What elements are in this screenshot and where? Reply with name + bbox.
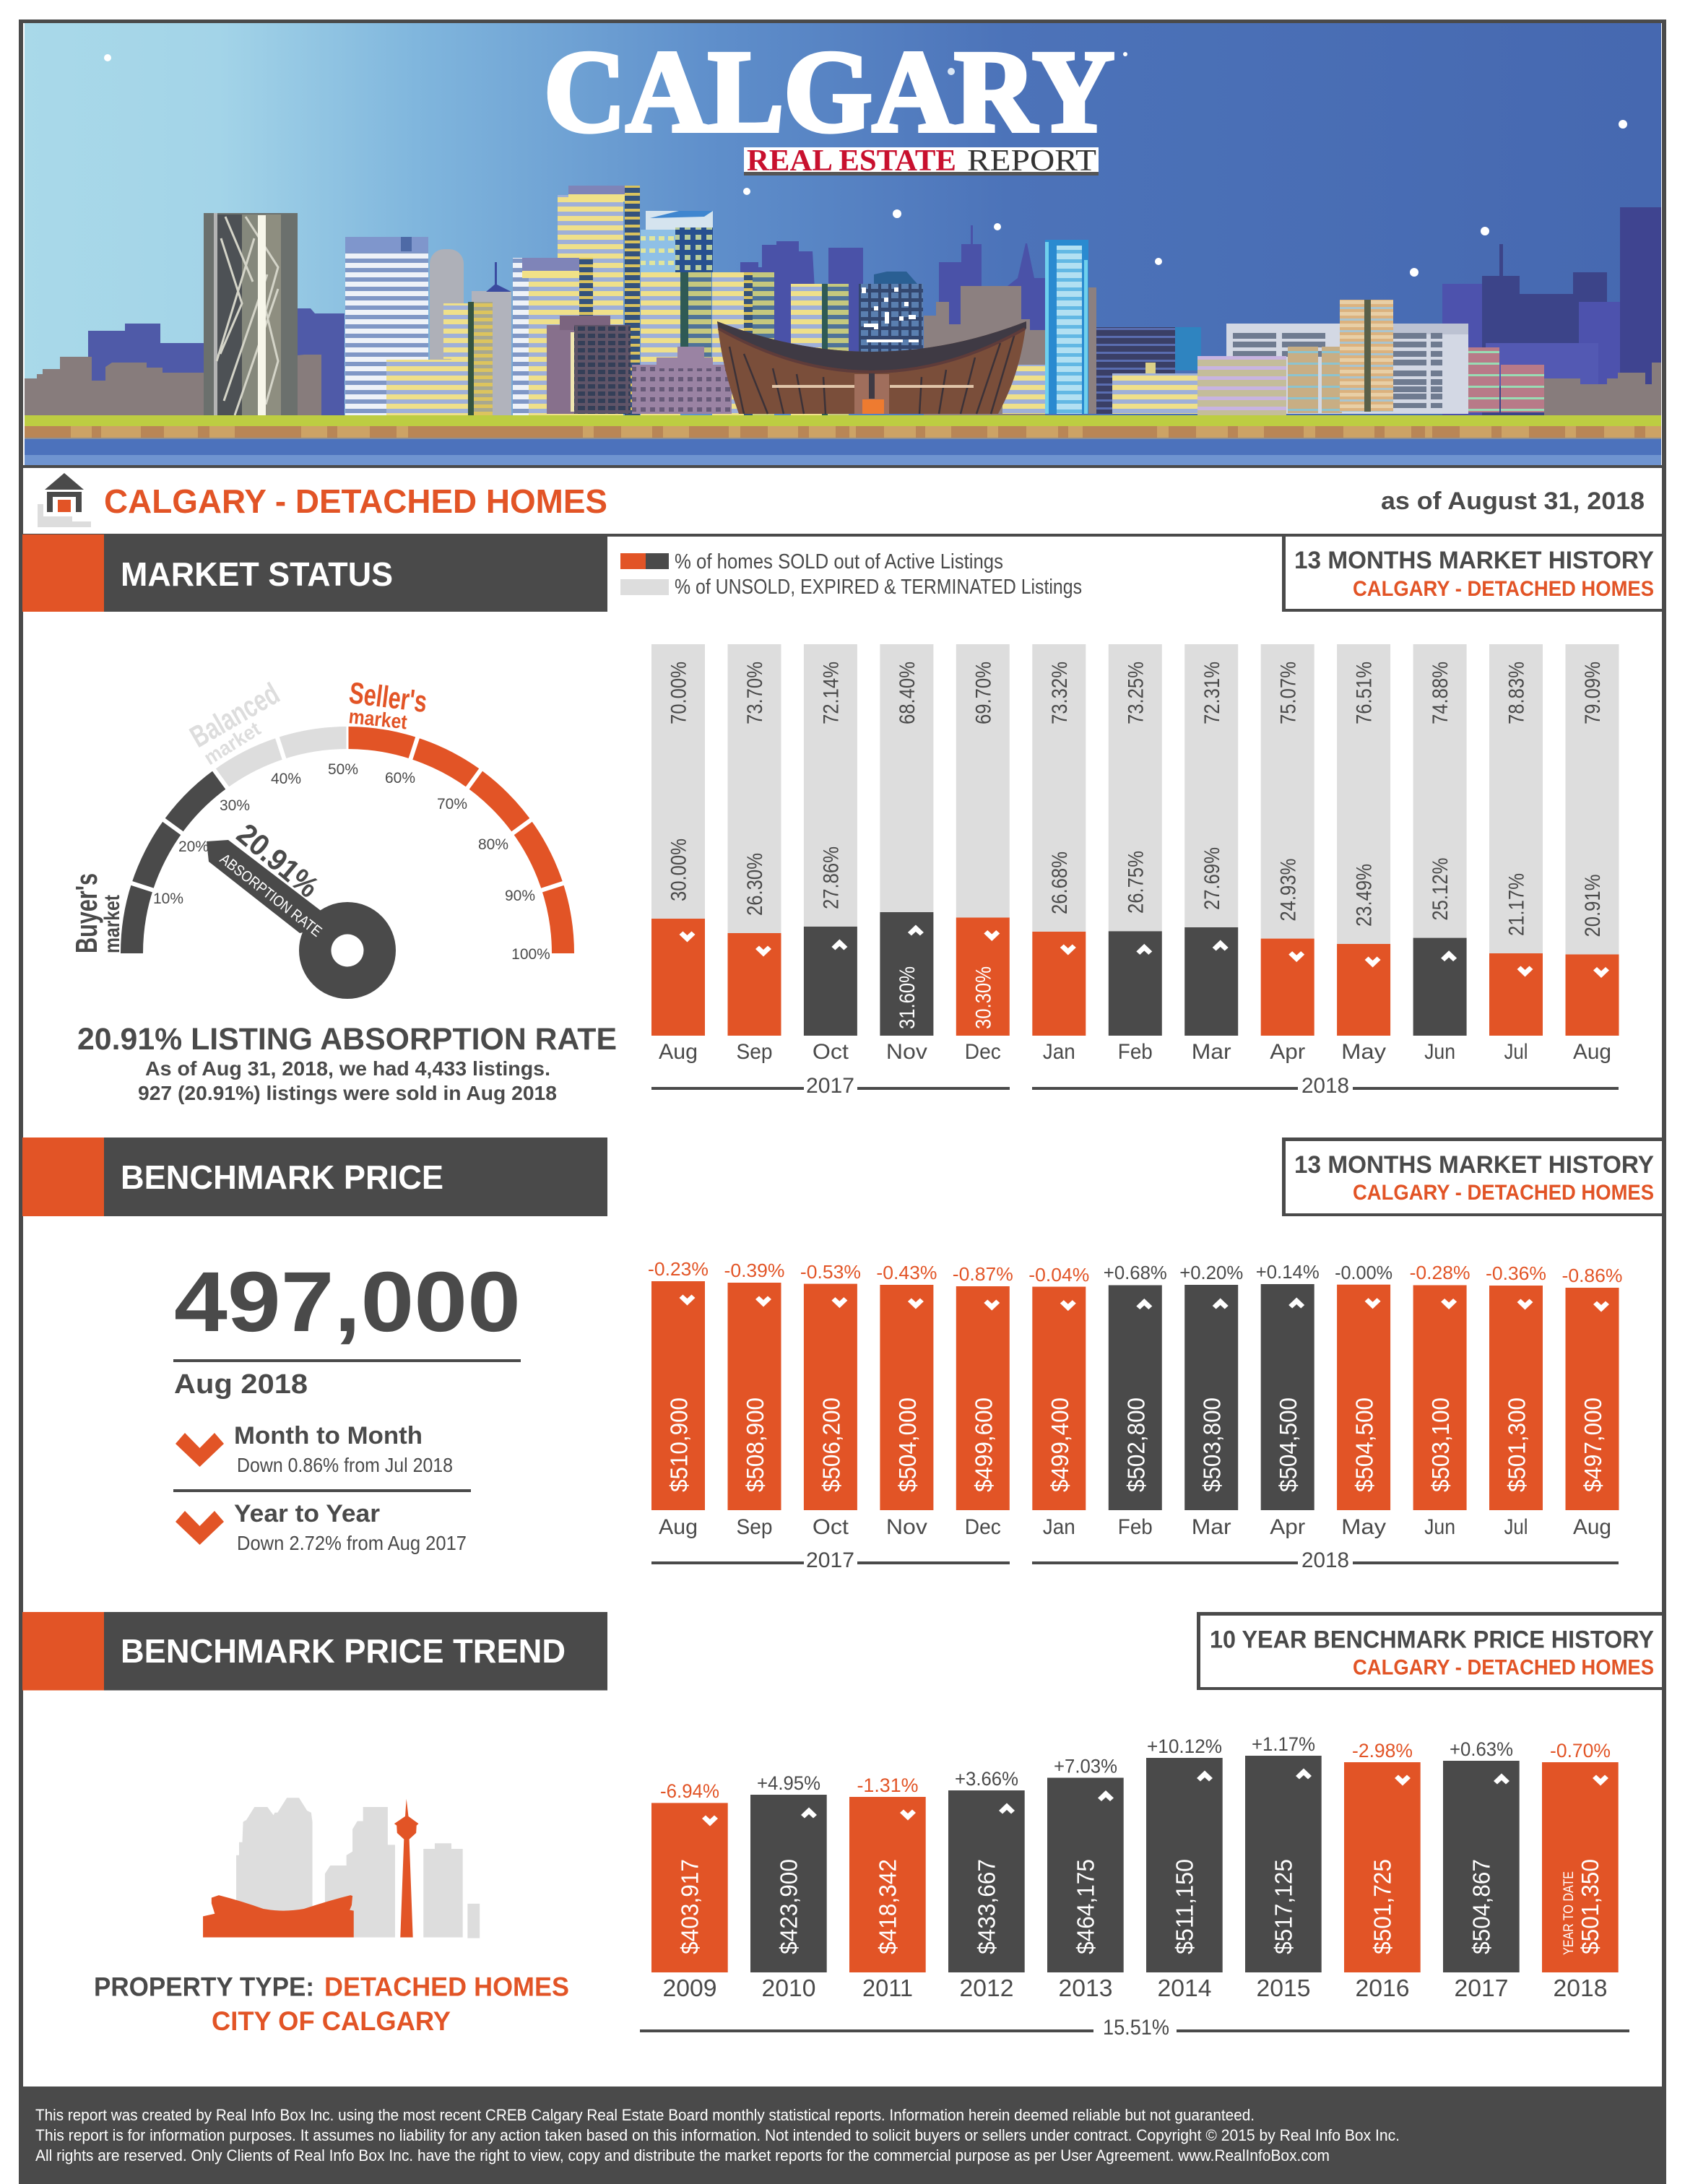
bar: Sep 2017: -0.39% — [724, 1260, 784, 1281]
bar: Jul 2018: Jul — [1504, 1040, 1528, 1064]
property type caption — [94, 1972, 569, 2036]
bar: Apr 2018: Apr — [1270, 1515, 1305, 1539]
subtitle: Real Estate Report: REPORT — [967, 144, 1096, 178]
bar: 2010: $423,900 — [776, 1859, 802, 1954]
bar: Jul 2018 — [1489, 644, 1543, 1064]
month to month — [234, 1422, 453, 1476]
bar: Jun 2018: 25.12% — [1429, 858, 1452, 921]
price date: Aug 2018 — [174, 1369, 308, 1400]
stacked bar chart: 13 months market history — [651, 644, 1619, 1098]
bar: 2014: 2014 — [1157, 1975, 1212, 2001]
bar: Feb 2018: +0.68% — [1104, 1262, 1167, 1283]
section header: benchmark price trend — [22, 1612, 607, 1690]
year to year: Year to Year — [234, 1500, 380, 1528]
year to year — [234, 1500, 467, 1554]
label: balanced market — [184, 676, 285, 769]
section header: benchmark price trend: BENCHMARK PRICE TREND — [121, 1632, 566, 1670]
bar: Oct 2017: Oct — [813, 1515, 849, 1539]
bar: Jan 2018: 26.68% — [1048, 852, 1072, 914]
bar: Dec 2017: Dec — [965, 1040, 1001, 1064]
section header: market status: MARKET STATUS — [121, 555, 393, 593]
text block: absorption rate: As of Aug 31, 2018, we had 4,433 listings. — [145, 1057, 550, 1080]
bar: 2013: 2013 — [1059, 1975, 1112, 2001]
bar: Jun 2018: Jun — [1424, 1040, 1455, 1064]
bar: 2009: $403,917 — [677, 1859, 703, 1954]
bar: Oct 2017: Oct — [813, 1040, 849, 1064]
bar: Sep 2017: $508,900 — [742, 1398, 768, 1492]
bar: Mar 2018: +0.20% — [1179, 1262, 1243, 1283]
icon: house — [38, 473, 91, 527]
bar: 2016: $501,725 — [1369, 1859, 1396, 1954]
bar chart: monthly benchmark prices — [648, 1258, 1622, 1572]
bar: 2014: $511,150 — [1171, 1859, 1198, 1954]
legend — [620, 550, 1082, 599]
bar: 2012: +3.66% — [955, 1768, 1018, 1790]
bar: Feb 2018: $502,800 — [1122, 1398, 1149, 1492]
bar: Aug 2017: Aug — [659, 1040, 698, 1064]
gauge scale labels: 70% — [437, 796, 467, 812]
bar: Mar 2018: Mar — [1192, 1515, 1231, 1539]
bar: May 2018: 76.51% — [1353, 662, 1377, 724]
bar: 2015 — [1245, 1733, 1322, 2001]
bar: Jul 2018: 78.83% — [1505, 662, 1529, 724]
footer: This report is for information purposes. It assumes no liability for any action taken based on this information. Not intended to solicit buyers or sellers under contract. Copyright © 2015 by Real Info Box Inc. — [35, 2126, 1400, 2144]
bar: 2011 — [849, 1774, 926, 2001]
bar: Aug 2018: -0.86% — [1561, 1265, 1622, 1286]
bar: Mar 2018: 27.69% — [1200, 847, 1224, 910]
bar: Jan 2018 — [1028, 1264, 1089, 1539]
bar: May 2018 — [1335, 1262, 1392, 1539]
bar: 2018 year to date — [1542, 1740, 1619, 2001]
bar: Nov 2017: 31.60% — [896, 966, 919, 1029]
bar: Aug 2017 — [648, 1258, 709, 1539]
bar: 2018 year to date: 2018 — [1553, 1975, 1608, 2001]
text block: absorption rate — [77, 1022, 617, 1104]
bar: Jan 2018: $499,400 — [1047, 1398, 1073, 1492]
bar: 2018 year to date: -0.70% — [1550, 1740, 1611, 1762]
year axis: 2018 — [1301, 1074, 1349, 1098]
gauge scale labels: 40% — [271, 771, 301, 787]
bar: Jan 2018 — [1032, 644, 1086, 1064]
bar: Aug 2017: -0.23% — [648, 1258, 709, 1280]
bar: Jul 2018: -0.36% — [1486, 1262, 1546, 1284]
title box: 13 months market history: CALGARY - DETACHED HOMES — [1353, 577, 1654, 601]
bar: Nov 2017: Nov — [886, 1515, 927, 1539]
label: seller's market — [347, 675, 429, 733]
bar: Feb 2018 — [1109, 644, 1162, 1064]
gauge scale labels: 50% — [328, 761, 358, 778]
bar: Sep 2017 — [724, 1260, 784, 1539]
bar: Dec 2017: 69.70% — [971, 662, 995, 724]
bar: 2016 — [1344, 1740, 1421, 2001]
bar: Sep 2017: Sep — [737, 1040, 773, 1064]
bar: Aug 2017: 30.00% — [667, 838, 691, 901]
bar: Jan 2018: Jan — [1043, 1515, 1075, 1539]
bar: Mar 2018: 72.31% — [1200, 662, 1224, 724]
text block: absorption rate: 20.91% LISTING ABSORPTION RATE — [77, 1022, 617, 1057]
footer: All rights are reserved. Only Clients of Real Info Box Inc. have the right to view, copy and distribute the market reports for the commercial purpose as per User Agreement. www.RealInfoBox.com — [35, 2146, 1330, 2164]
bar: Dec 2017 — [953, 1263, 1013, 1539]
bar: Aug 2017: $510,900 — [666, 1398, 692, 1492]
bar: Jan 2018: -0.04% — [1028, 1264, 1089, 1286]
gauge: listing absorption rate — [69, 675, 568, 999]
bar: Aug 2018 — [1566, 644, 1619, 1064]
bar: 2016: 2016 — [1355, 1975, 1410, 2001]
benchmark price summary — [173, 1254, 521, 1554]
bar: 2017: 2017 — [1455, 1975, 1508, 2001]
bar: Aug 2018: 79.09% — [1581, 662, 1605, 724]
bar: May 2018: $504,500 — [1351, 1398, 1378, 1492]
bar: Jun 2018: 74.88% — [1429, 662, 1452, 724]
bar: 2012: $433,667 — [974, 1859, 1000, 1954]
label: balanced market: Balanced — [184, 676, 285, 754]
label: seller's market: Seller's — [347, 675, 429, 719]
bar: Dec 2017: 30.30% — [971, 966, 995, 1029]
bar: Apr 2018: 24.93% — [1276, 859, 1300, 922]
bar: Apr 2018: $504,500 — [1275, 1398, 1301, 1492]
bar: Apr 2018 — [1261, 644, 1314, 1064]
bar: Apr 2018: 75.07% — [1276, 662, 1300, 724]
property type caption: CITY OF CALGARY — [212, 2006, 451, 2036]
gauge scale labels — [153, 761, 550, 963]
bar: 2011: $418,342 — [875, 1859, 901, 1954]
bar: Oct 2017: -0.53% — [800, 1261, 861, 1283]
bar: Feb 2018: 73.25% — [1124, 662, 1148, 724]
gauge scale labels: 60% — [385, 770, 415, 786]
bar: Mar 2018 — [1179, 1262, 1243, 1539]
bar: Apr 2018: +0.14% — [1256, 1261, 1320, 1283]
bar: Aug 2017 — [651, 644, 705, 1064]
bar: Feb 2018: 26.75% — [1124, 851, 1148, 914]
year axis: 2017 — [806, 1074, 854, 1098]
total change axis: 15.51% — [1103, 2016, 1169, 2040]
title box: 13 months market history: 13 MONTHS MARKET HISTORY — [1294, 1151, 1654, 1179]
bar: Nov 2017 — [880, 644, 933, 1064]
bar: 2015: 2015 — [1257, 1975, 1310, 2001]
gauge scale labels: 100% — [511, 946, 550, 963]
bar: 2011: 2011 — [862, 1975, 913, 2001]
bar: Mar 2018 — [1184, 644, 1238, 1064]
title box: 10 year benchmark price history: CALGARY - DETACHED HOMES — [1353, 1655, 1654, 1680]
year to year: Down 2.72% from Aug 2017 — [237, 1532, 467, 1554]
title: CALGARY: CALGARY — [544, 27, 1114, 157]
title box: 13 months market history: CALGARY - DETACHED HOMES — [1353, 1181, 1654, 1205]
bar: Mar 2018: Mar — [1192, 1040, 1231, 1064]
star on title — [948, 68, 955, 75]
bar: Oct 2017 — [804, 644, 857, 1064]
bar: 2016: -2.98% — [1352, 1740, 1413, 1762]
needle caption: ABSORPTION RATE — [217, 851, 325, 940]
gauge scale labels: 90% — [505, 888, 535, 904]
title box: 10 year benchmark price history — [1197, 1612, 1664, 1690]
heading: Calgary detached homes: CALGARY - DETACHED HOMES — [104, 482, 607, 520]
section header: benchmark price — [22, 1138, 607, 1216]
bar: 2014 — [1146, 1736, 1223, 2001]
footer — [19, 2086, 1666, 2184]
subtitle: Real Estate Report: REAL ESTATE — [747, 144, 956, 178]
bar: 2014: +10.12% — [1147, 1736, 1222, 1757]
bar: Feb 2018: Feb — [1118, 1040, 1153, 1064]
text block: absorption rate: 927 (20.91%) listings were sold in Aug 2018 — [138, 1082, 557, 1104]
bar: Oct 2017: 27.86% — [820, 846, 844, 909]
legend: % of UNSOLD, EXPIRED & TERMINATED Listings — [675, 576, 1082, 599]
bar: Jan 2018: Jan — [1043, 1040, 1075, 1064]
year axis: 2018 — [1301, 1548, 1349, 1572]
bar: Feb 2018: Feb — [1118, 1515, 1153, 1539]
bar: 2018 year to date: YEAR TO DATE — [1561, 1871, 1577, 1955]
bar: Sep 2017: Sep — [737, 1515, 773, 1539]
date: as of August 31, 2018 — [1381, 488, 1645, 515]
stars — [104, 52, 1627, 277]
bar: Jun 2018 — [1413, 644, 1467, 1064]
bar: Aug 2017: 70.00% — [667, 662, 691, 724]
title box: 13 months market history — [1282, 534, 1664, 612]
gauge scale labels: 20% — [178, 838, 209, 855]
needle — [207, 840, 396, 999]
icon: city skyline — [203, 1798, 480, 1938]
bar: Aug 2018 — [1561, 1265, 1622, 1539]
label: buyer's market: Buyer's — [69, 873, 103, 953]
title box: 13 months market history — [1282, 1138, 1664, 1216]
year axis — [651, 1074, 1619, 1098]
bar: 2017: $504,867 — [1468, 1859, 1495, 1954]
bar: Jul 2018: Jul — [1504, 1515, 1528, 1539]
bar: Nov 2017 — [876, 1262, 937, 1539]
bar: Aug 2017: Aug — [659, 1515, 698, 1539]
icon: month-to-month down arrow — [176, 1433, 224, 1467]
bar: Feb 2018 — [1104, 1262, 1167, 1539]
bar: Jul 2018: 21.17% — [1505, 873, 1529, 936]
bar: Jun 2018: -0.28% — [1410, 1262, 1470, 1283]
bar: 2017: +0.63% — [1450, 1738, 1513, 1760]
bar: 2017 — [1443, 1738, 1520, 2001]
bar: Nov 2017: Nov — [886, 1040, 927, 1064]
title box: 10 year benchmark price history: 10 YEAR BENCHMARK PRICE HISTORY — [1210, 1626, 1654, 1654]
bar: Mar 2018: $503,800 — [1199, 1398, 1226, 1492]
total change axis — [640, 2016, 1629, 2040]
gauge scale labels: 30% — [220, 797, 250, 814]
arena: Saddledome — [717, 321, 1026, 414]
bar: Apr 2018 — [1256, 1261, 1320, 1539]
property type caption: PROPERTY TYPE: — [94, 1972, 314, 2002]
bar: 2015: $517,125 — [1270, 1859, 1297, 1954]
bar: May 2018: 23.49% — [1353, 864, 1377, 927]
bar: 2013 — [1047, 1755, 1124, 2001]
divider above market status — [22, 534, 1662, 537]
bar: 2010: 2010 — [761, 1975, 816, 2001]
bar: 2013: +7.03% — [1054, 1755, 1117, 1777]
gauge arc — [126, 721, 568, 953]
bar: Sep 2017 — [728, 644, 781, 1064]
banner: Calgary skyline illustration — [22, 22, 1664, 465]
label: seller's market: market — [347, 705, 408, 733]
year axis — [651, 1548, 1619, 1572]
label: balanced market: market — [200, 717, 264, 769]
separator line — [173, 1489, 471, 1492]
property type caption: DETACHED HOMES — [324, 1972, 569, 2002]
label: buyer's market: market — [100, 895, 124, 953]
bar: 2010 — [750, 1772, 827, 2001]
bar: Dec 2017: Dec — [965, 1515, 1001, 1539]
bar: Nov 2017: 68.40% — [896, 662, 919, 724]
bar: Jun 2018 — [1410, 1262, 1470, 1539]
icon: year-to-year down arrow — [176, 1511, 224, 1545]
bar: Jan 2018: 73.32% — [1048, 662, 1072, 724]
gauge scale labels: 10% — [153, 890, 183, 907]
bar: Dec 2017: $499,600 — [970, 1398, 997, 1492]
bar: 2012: 2012 — [959, 1975, 1014, 2001]
bar: 2009 — [651, 1780, 728, 2001]
bar: Aug 2018: Aug — [1573, 1515, 1611, 1539]
bar chart: 10 year benchmark price — [640, 1733, 1629, 2040]
bar: Dec 2017 — [956, 644, 1010, 1064]
bar: 2015: +1.17% — [1252, 1733, 1315, 1755]
bar: May 2018 — [1337, 644, 1390, 1064]
month to month: Down 0.86% from Jul 2018 — [237, 1454, 453, 1476]
bar: May 2018: May — [1341, 1515, 1386, 1539]
bar: 2018 year to date: $501,350 — [1577, 1859, 1603, 1954]
bar: 2011: -1.31% — [857, 1774, 919, 1796]
bar: Aug 2018: $497,000 — [1580, 1398, 1606, 1492]
bar: Jun 2018: $503,100 — [1427, 1398, 1454, 1492]
gauge scale labels: 80% — [478, 836, 508, 853]
bar: Oct 2017 — [800, 1261, 861, 1539]
bar: Dec 2017: -0.87% — [953, 1263, 1013, 1285]
bar: Apr 2018: Apr — [1270, 1040, 1305, 1064]
bar: Sep 2017: 26.30% — [743, 853, 767, 916]
bar: Jul 2018 — [1486, 1262, 1546, 1539]
bar: Aug 2018: 20.91% — [1581, 874, 1605, 937]
bar: Oct 2017: 72.14% — [820, 662, 844, 724]
bar: 2012 — [948, 1768, 1025, 2001]
bar: May 2018: May — [1341, 1040, 1386, 1064]
section header: benchmark price: BENCHMARK PRICE — [121, 1158, 443, 1196]
label: buyer's market — [69, 873, 124, 953]
year axis: 2017 — [806, 1548, 854, 1572]
subtitle: Real Estate Report — [744, 144, 1099, 178]
bar: Aug 2018: Aug — [1573, 1040, 1611, 1064]
divider under banner — [22, 465, 1662, 468]
title box: 13 months market history: 13 MONTHS MARKET HISTORY — [1294, 547, 1654, 574]
bar: 2010: +4.95% — [757, 1772, 820, 1794]
bar: Nov 2017: $504,000 — [894, 1398, 921, 1492]
ground strips — [22, 415, 1662, 427]
section header: market status — [22, 534, 607, 612]
legend: % of homes SOLD out of Active Listings — [675, 550, 1003, 573]
footer: This report was created by Real Info Box Inc. using the most recent CREB Calgary Real Estate Board monthly statistical reports. Information herein deemed reliable but not guaranteed. — [35, 2106, 1255, 2124]
bar: 2009: -6.94% — [660, 1780, 719, 1802]
bar: 2009: 2009 — [663, 1975, 716, 2001]
bar: Jun 2018: Jun — [1424, 1515, 1455, 1539]
needle value: 20.91% — [230, 817, 326, 904]
bar: Oct 2017: $506,200 — [818, 1398, 844, 1492]
bar: Jul 2018: $501,300 — [1504, 1398, 1530, 1492]
bar: Sep 2017: 73.70% — [743, 662, 767, 724]
bar: 2013: $464,175 — [1073, 1859, 1099, 1954]
bar: Nov 2017: -0.43% — [876, 1262, 937, 1283]
month to month: Month to Month — [234, 1422, 423, 1450]
bar: May 2018: -0.00% — [1335, 1262, 1392, 1283]
big price: 497,000 — [174, 1254, 521, 1350]
